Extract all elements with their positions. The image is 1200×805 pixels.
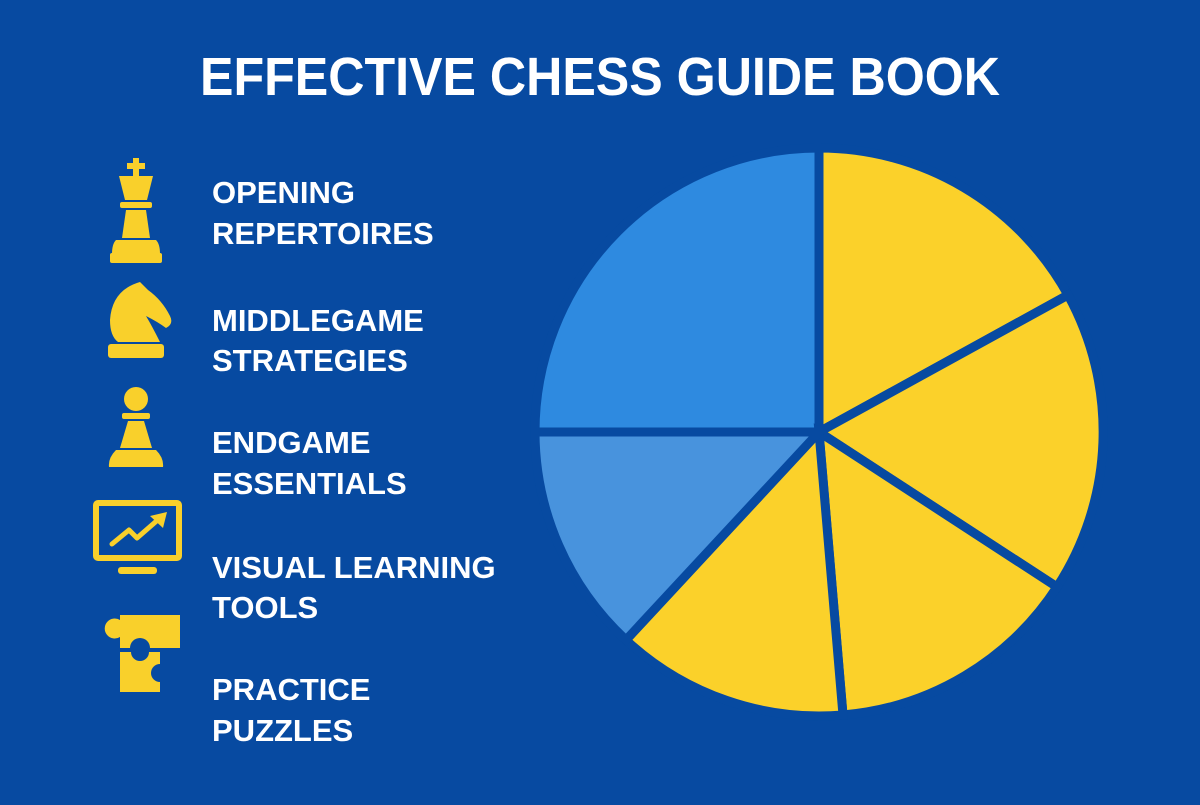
label: ENDGAME xyxy=(212,425,370,460)
label: PUZZLES xyxy=(212,713,353,748)
icon: puzzle xyxy=(105,615,180,692)
label: STRATEGIES xyxy=(212,343,408,378)
label: VISUAL LEARNING xyxy=(212,550,496,585)
item: practice puzzles xyxy=(105,615,370,748)
label: PRACTICE xyxy=(212,672,370,707)
item: endgame essentials xyxy=(109,387,407,501)
icon: monitor chart xyxy=(96,503,179,574)
item: visual learning tools xyxy=(96,503,496,625)
icon: king xyxy=(110,158,162,263)
label: OPENING xyxy=(212,175,355,210)
label: TOOLS xyxy=(212,590,318,625)
label: REPERTOIRES xyxy=(212,216,434,251)
pie chart xyxy=(535,148,1103,716)
item: middlegame strategies xyxy=(108,282,424,378)
icon: pawn xyxy=(109,387,163,467)
icon: knight xyxy=(108,282,171,358)
title: EFFECTIVE CHESS GUIDE BOOK xyxy=(200,47,1000,107)
label: MIDDLEGAME xyxy=(212,303,424,338)
label: ESSENTIALS xyxy=(212,466,407,501)
item: opening repertoires xyxy=(110,158,434,263)
